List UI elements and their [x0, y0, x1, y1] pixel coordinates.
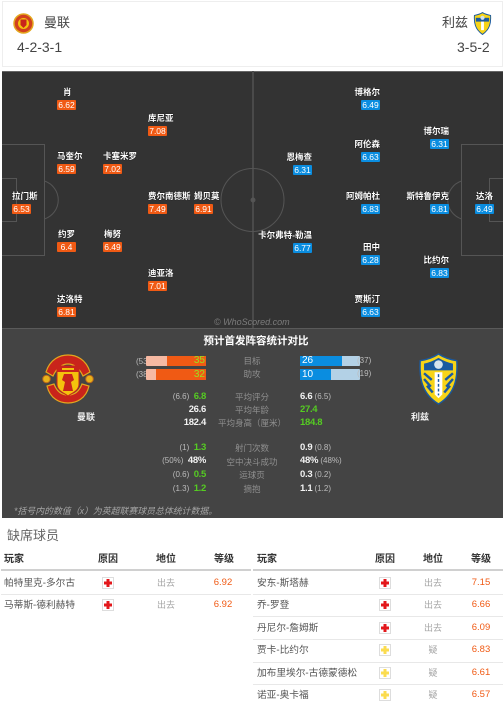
table: away missing players	[252, 552, 504, 712]
player: 库尼亚: 库尼亚	[148, 113, 174, 123]
row: 丹尼尔-詹姆斯	[252, 621, 504, 635]
player: 贾斯汀	[354, 294, 380, 317]
row: 加布里埃尔-古德蒙德松: 疑	[428, 668, 438, 678]
text: 6.6 (6.5)	[300, 391, 331, 402]
goals bar home: (53)	[136, 357, 150, 366]
panel: pitch	[2, 71, 503, 329]
row: 诺亚-奥卡福	[252, 688, 504, 702]
player: 阿伦森: 阿伦森	[354, 139, 380, 149]
stat row: height: 182.4	[184, 417, 206, 428]
row: 加布里埃尔-古德蒙德松: 6.61	[472, 667, 490, 678]
section heading: 缺席球员	[7, 528, 59, 543]
row: 诺亚-奥卡福: 疑	[428, 690, 438, 700]
text: 摘抱	[243, 484, 260, 494]
goals bar away: (37)	[357, 356, 371, 365]
player: 迪亚洛: 7.01	[149, 281, 166, 291]
player: 姆贝莫: 6.91	[195, 204, 212, 214]
row: 诺亚-奥卡福: 6.57	[472, 689, 490, 700]
player: 约罗	[57, 229, 76, 252]
label: assists: 助攻	[243, 369, 260, 379]
player: 姆贝莫	[194, 191, 220, 214]
player: 卡尔弗特-勒温: 卡尔弗特-勒温	[258, 230, 312, 240]
icon: Leeds small crest	[474, 12, 492, 35]
label: goals: 目标	[243, 356, 260, 366]
player: 阿伦森	[354, 139, 380, 162]
player: 卡尔弗特-勒温: 6.77	[294, 243, 311, 253]
row: 安东-斯塔赫	[252, 576, 504, 590]
player: 拉门斯: 拉门斯	[12, 191, 38, 201]
row: 乔-罗登: 6.66	[472, 599, 490, 610]
player: 迪亚洛: 迪亚洛	[148, 268, 174, 278]
player: 斯特鲁伊克	[406, 191, 449, 214]
player: 阿姆帕杜: 阿姆帕杜	[346, 191, 380, 201]
table header: 地位	[156, 554, 176, 565]
player: 达洛: 达洛	[476, 191, 493, 201]
player: 马奎尔	[57, 151, 83, 174]
text: 平均评分	[235, 392, 269, 402]
assists bar home: (38)	[136, 370, 150, 379]
row: 贾卡-比约尔	[252, 643, 504, 657]
row: 加布里埃尔-古德蒙德松	[252, 666, 504, 680]
player: 博格尔: 博格尔	[354, 87, 380, 97]
player: 拉门斯	[12, 191, 38, 214]
player: 博格尔: 6.49	[362, 100, 379, 110]
table header	[0, 552, 252, 572]
stat row: dribbles: (0.6) 0.5	[173, 469, 206, 480]
text: 1.1 (1.2)	[300, 483, 331, 494]
assists bar away: 10	[302, 369, 313, 380]
row: 贾卡-比约尔: 疑	[428, 645, 438, 655]
text: 27.4	[300, 404, 317, 415]
text: 48% (48%)	[300, 455, 342, 466]
row: 加布里埃尔-古德蒙德松: 加布里埃尔-古德蒙德松	[257, 668, 357, 679]
home team name: 曼联	[44, 15, 70, 30]
text: 平均身高（厘米）	[218, 418, 286, 428]
player: 迪亚洛	[148, 268, 174, 291]
icon: Leeds crest	[419, 353, 458, 405]
player: 比约尔: 6.83	[431, 268, 448, 278]
player: 库尼亚	[148, 113, 174, 136]
missing players section	[1, 528, 503, 701]
players on pitch	[12, 87, 494, 317]
row: 安东-斯塔赫: 安东-斯塔赫	[257, 578, 309, 589]
footnote: *括号内的数值（x）为英超联赛球员总体统计数据。	[14, 506, 217, 516]
player: 梅努: 梅努	[104, 229, 121, 239]
player: 约罗: 约罗	[58, 229, 75, 239]
row: 安东-斯塔赫: 7.15	[472, 577, 490, 588]
text: 空中决斗成功	[226, 457, 278, 467]
player: 斯特鲁伊克: 6.81	[431, 204, 448, 214]
row: 马蒂斯-德利赫特: 马蒂斯-德利赫特	[4, 600, 75, 611]
player: 马奎尔: 马奎尔	[57, 151, 83, 161]
player: 卡尔弗特-勒温	[258, 230, 312, 253]
home formation: 4-2-3-1	[17, 39, 62, 55]
player: 博尔瑞	[423, 126, 449, 149]
row: 乔-罗登: 出去	[424, 600, 442, 610]
assists bar home	[136, 369, 206, 380]
icon: Manchester United crest	[42, 354, 94, 404]
text: 射门次数	[235, 443, 269, 453]
assists bar away: (19)	[357, 369, 371, 378]
row: 乔-罗登	[252, 598, 504, 612]
assists bar home: 32	[194, 369, 205, 380]
table: home missing players	[0, 552, 252, 642]
player: 达洛特	[57, 294, 83, 317]
row: 安东-斯塔赫: 出去	[424, 578, 442, 588]
stat row: aerial: (50%) 48%	[162, 455, 206, 466]
row: 乔-罗登: 乔-罗登	[257, 600, 289, 611]
player: 卡塞米罗: 卡塞米罗	[103, 151, 137, 161]
row: 马蒂斯-德利赫特	[0, 598, 252, 612]
player: 恩梅查	[286, 152, 312, 175]
player: 田中	[361, 242, 380, 265]
player: 田中: 6.28	[362, 255, 379, 265]
player: 达洛: 6.49	[476, 204, 493, 214]
player: 阿姆帕杜	[346, 191, 380, 214]
player: 阿姆帕杜: 6.83	[362, 204, 379, 214]
player: 梅努: 6.49	[104, 242, 121, 252]
player: 库尼亚: 7.08	[149, 126, 166, 136]
row: 丹尼尔-詹姆斯: 6.09	[472, 622, 490, 633]
player: 斯特鲁伊克: 斯特鲁伊克	[406, 191, 449, 201]
match header	[2, 1, 503, 67]
away crest label: 利兹	[411, 412, 429, 422]
player: 田中: 田中	[363, 242, 380, 252]
player: 肖	[57, 87, 76, 110]
goals bar home: 35	[194, 355, 205, 366]
player: 肖: 肖	[63, 87, 72, 97]
panel: lineup stats comparison	[2, 328, 503, 518]
player: 贾斯汀: 贾斯汀	[354, 294, 380, 304]
stat row: tackles: (1.3) 1.2	[173, 483, 206, 494]
row: 帕特里克-多尔古: 出去	[157, 578, 175, 588]
player: 阿伦森: 6.63	[362, 152, 379, 162]
row: 马蒂斯-德利赫特: 出去	[157, 600, 175, 610]
player: 拉门斯: 6.53	[13, 204, 30, 214]
table header: 地位	[423, 554, 443, 565]
goals bar away: 26	[302, 355, 313, 366]
player: 达洛特: 6.81	[58, 307, 75, 317]
stats title: 预计首发阵容统计对比	[204, 335, 308, 347]
player: 约罗: 6.4	[61, 242, 72, 252]
table header: 原因	[98, 554, 118, 565]
player: 比约尔	[423, 255, 449, 278]
row: 帕特里克-多尔古	[0, 576, 252, 590]
player: 比约尔: 比约尔	[423, 255, 449, 265]
player: 达洛特: 达洛特	[57, 294, 83, 304]
player: 费尔南德斯: 费尔南德斯	[148, 191, 191, 201]
player: 博尔瑞: 6.31	[431, 139, 448, 149]
text: 0.3 (0.2)	[300, 469, 331, 480]
away team name: 利兹	[442, 15, 468, 30]
player: 姆贝莫: 姆贝莫	[194, 191, 220, 201]
player: 马奎尔: 6.59	[58, 164, 75, 174]
row: 帕特里克-多尔古: 6.92	[214, 577, 232, 588]
assists bar away	[300, 369, 371, 380]
watermark: © WhoScored.com	[214, 317, 290, 327]
player: 卡塞米罗	[103, 151, 137, 174]
table header: 玩家	[4, 554, 24, 565]
row: 丹尼尔-詹姆斯: 出去	[424, 623, 442, 633]
text: 0.9 (0.8)	[300, 442, 331, 453]
player: 博尔瑞: 博尔瑞	[423, 126, 449, 136]
player: 卡塞米罗: 7.02	[104, 164, 121, 174]
player: 恩梅查: 6.31	[294, 165, 311, 175]
player: 贾斯汀: 6.63	[362, 307, 379, 317]
pitch markings	[2, 71, 503, 328]
player: 肖: 6.62	[58, 100, 75, 110]
player: 费尔南德斯: 7.49	[149, 204, 166, 214]
player: 博格尔	[354, 87, 380, 110]
player: 恩梅查: 恩梅查	[286, 152, 312, 162]
row: 贾卡-比约尔: 贾卡-比约尔	[257, 645, 309, 656]
home crest label: 曼联	[77, 412, 95, 422]
goals bar home	[136, 355, 206, 366]
row: 帕特里克-多尔古: 帕特里克-多尔古	[4, 578, 75, 589]
row: 诺亚-奥卡福: 诺亚-奥卡福	[257, 690, 309, 701]
text: 平均年龄	[235, 405, 269, 415]
row: 马蒂斯-德利赫特: 6.92	[214, 599, 232, 610]
player: 梅努	[103, 229, 122, 252]
table header: 原因	[375, 554, 395, 565]
row: 丹尼尔-詹姆斯: 丹尼尔-詹姆斯	[257, 623, 318, 634]
table header: 玩家	[257, 554, 277, 565]
table header	[252, 552, 504, 572]
goals bar away	[300, 355, 371, 366]
stat row: age: 26.6	[189, 404, 206, 415]
row: 贾卡-比约尔: 6.83	[472, 644, 490, 655]
stat row: rating: (6.6) 6.8	[173, 391, 206, 402]
player: 达洛	[475, 191, 494, 214]
text: 184.8	[300, 417, 322, 428]
away formation: 3-5-2	[457, 39, 490, 55]
table header: 等级	[471, 554, 491, 565]
player: 费尔南德斯	[148, 191, 191, 214]
table header: 等级	[214, 554, 234, 565]
stat row: shots: (1) 1.3	[179, 442, 206, 453]
text: 运球页	[239, 470, 265, 480]
icon: Manchester United small crest	[13, 13, 34, 34]
